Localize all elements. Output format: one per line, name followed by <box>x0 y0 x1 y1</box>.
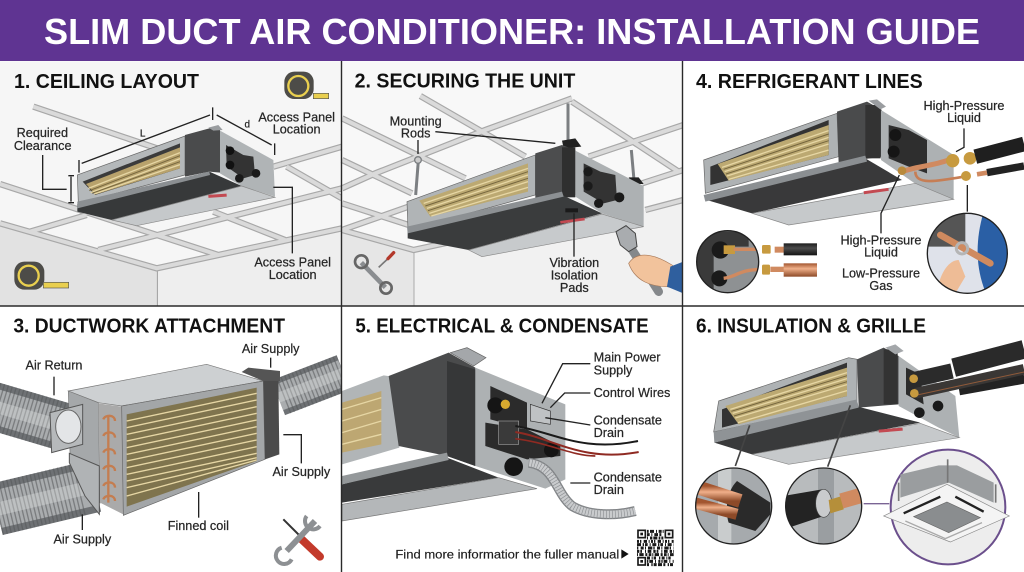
title banner <box>0 0 1024 61</box>
label: main power supply <box>542 351 660 403</box>
icon: tape measure top <box>284 72 329 99</box>
footer note: Find more informatior the fuller manual <box>395 547 619 561</box>
label: access panel top <box>258 110 335 137</box>
dimension lines L and d: L <box>140 129 146 140</box>
label: required clearance: Clearance <box>14 139 72 153</box>
label: air return <box>26 359 82 395</box>
duct unit <box>77 125 275 226</box>
heading: 3. DUCTWORK ATTACHMENT <box>13 315 285 338</box>
label: air return: Air Return <box>26 359 82 373</box>
icon: crossed tools <box>276 516 320 564</box>
label: condensate drain lower <box>570 470 662 497</box>
label: air supply lower: Air Supply <box>53 532 112 546</box>
label: access panel bottom: Location <box>269 268 317 282</box>
condensate hose <box>529 463 635 514</box>
arrow: footer pointer <box>621 549 629 559</box>
duct unit <box>714 344 959 464</box>
label: high-pressure liquid middle: High-Pressure <box>841 233 921 247</box>
icon: wrench and screwdriver <box>355 253 394 294</box>
label: mounting rods: Mounting <box>390 114 442 128</box>
label: access panel bottom <box>254 187 331 282</box>
refrigerant pipes <box>898 144 1024 181</box>
label: condensate drain lower: Drain <box>594 483 624 497</box>
inset: pipe connections <box>695 231 817 293</box>
panel: 6. insulation and grille <box>695 318 1024 566</box>
label: vibration isolation pads: Pads <box>560 281 589 295</box>
label: air supply top <box>242 342 300 368</box>
wires <box>515 426 639 456</box>
label: high-pressure liquid middle: Liquid <box>864 246 898 260</box>
label: air supply top: Air Supply <box>242 342 300 356</box>
label: high-pressure liquid middle <box>841 175 921 260</box>
connector line to grille inset <box>864 502 889 506</box>
heading: 6. INSULATION & GRILLE <box>696 315 926 338</box>
inset: insulated copper <box>694 468 772 544</box>
dimension lines L and d: d <box>245 120 250 131</box>
panel: 2. securing the unit <box>342 61 683 307</box>
panel: 5. electrical and condensate <box>342 306 684 572</box>
heading: 1. CEILING LAYOUT <box>14 70 199 93</box>
dimension lines L and d <box>79 107 275 173</box>
label: access panel bottom: Access Panel <box>254 256 331 270</box>
title banner: SLIM DUCT AIR CONDITIONER: INSTALLATION GUIDE <box>44 11 980 52</box>
inset: brazing <box>925 212 1009 293</box>
label: high-pressure liquid top <box>924 99 1004 152</box>
label: control wires <box>550 386 670 408</box>
label: air supply lower <box>53 514 112 546</box>
label: condensate drain upper <box>545 413 662 440</box>
label: high-pressure liquid top: Liquid <box>947 111 981 125</box>
leader lines <box>735 405 850 467</box>
inset: pipe with sleeve <box>784 468 864 544</box>
label: finned coil <box>168 492 229 533</box>
label: mounting rods: Rods <box>401 126 430 140</box>
label: required clearance <box>14 126 74 203</box>
label: high-pressure liquid top: High-Pressure <box>924 99 1004 113</box>
ribbed ducts <box>0 373 343 509</box>
duct unit <box>704 99 954 225</box>
label: air supply right <box>272 435 331 479</box>
label: air supply right: Air Supply <box>272 465 331 479</box>
label: main power supply: Supply <box>594 363 633 377</box>
label: mounting rods <box>390 114 555 154</box>
heading: 2. SECURING THE UNIT <box>355 69 576 92</box>
QR code <box>637 529 674 566</box>
label: access panel top: Access Panel <box>258 110 335 124</box>
label: low-pressure gas: Gas <box>869 279 893 293</box>
panel: 1. ceiling layout <box>0 61 342 307</box>
panel: 3. ductwork attachment <box>0 306 343 572</box>
wrench and hand <box>616 226 683 293</box>
label: access panel top: Location <box>273 123 321 137</box>
coil box <box>50 364 280 515</box>
mounting rods <box>415 103 644 195</box>
inset: ceiling cassette grille <box>884 450 1009 564</box>
label: vibration isolation pads: Vibration <box>549 256 599 270</box>
insulated pipes <box>909 349 1024 398</box>
arrow to inset <box>965 185 969 212</box>
label: condensate drain lower: Condensate <box>594 470 662 484</box>
label: main power supply: Main Power <box>594 351 660 365</box>
label: control wires: Control Wires <box>594 386 670 400</box>
label: low-pressure gas: Low-Pressure <box>842 267 920 281</box>
label: low-pressure gas <box>842 267 920 293</box>
label: condensate drain upper: Drain <box>594 426 624 440</box>
label: condensate drain upper: Condensate <box>594 413 662 427</box>
heading: 5. ELECTRICAL & CONDENSATE <box>355 315 649 338</box>
duct unit <box>407 145 644 257</box>
label: vibration isolation pads <box>549 213 599 295</box>
duct unit close-up <box>342 348 565 521</box>
icon: tape measure bottom <box>14 262 69 290</box>
label: required clearance: Required <box>17 126 68 140</box>
label: vibration isolation pads: Isolation <box>551 268 598 282</box>
label: finned coil: Finned coil <box>168 519 229 533</box>
heading: 4. REFRIGERANT LINES <box>696 70 923 93</box>
panel: 4. refrigerant lines <box>683 74 1024 294</box>
